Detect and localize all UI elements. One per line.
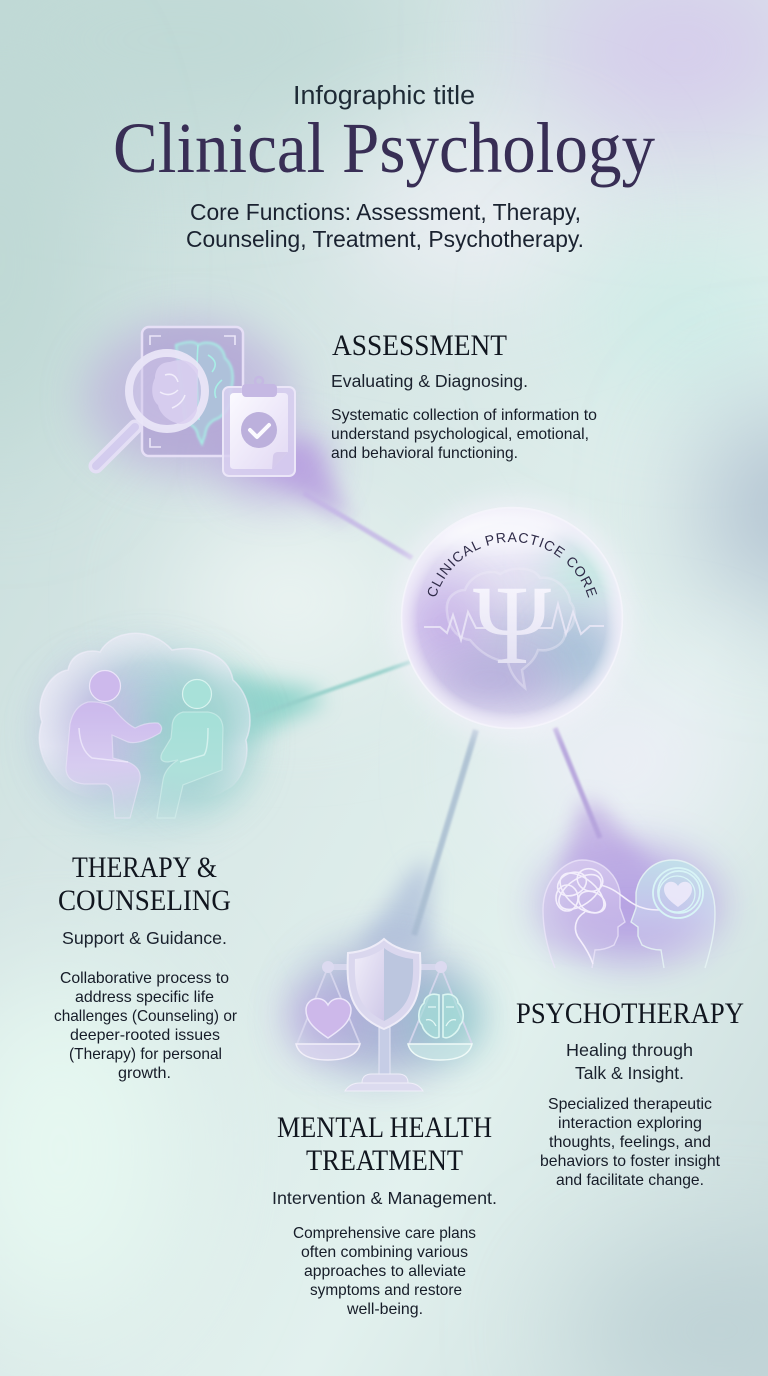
icon: therapy and counseling: [39, 633, 250, 830]
text: mental health treatment: Intervention & Management.: [272, 1188, 497, 1208]
magnifier lens: [129, 353, 205, 429]
text: assessment: ASSESSMENT: [332, 329, 507, 362]
text: therapy and counseling: challenges (Counseling) or: [54, 1008, 237, 1025]
connector: assessment beam: [235, 440, 412, 558]
text: therapy and counseling: [54, 851, 237, 1082]
text: psychotherapy: Healing through: [566, 1040, 693, 1060]
connector: psychotherapy beam: [555, 728, 655, 875]
text: psychotherapy: behaviors to foster insight: [540, 1153, 721, 1170]
text: assessment: Systematic collection of information to: [331, 407, 597, 424]
psi symbol: Ψ: [473, 563, 552, 688]
text: psychotherapy: and facilitate change.: [556, 1172, 704, 1189]
text: assessment: understand psychological, emotional,: [331, 426, 589, 443]
central core: [391, 497, 630, 742]
cloud: [39, 633, 250, 804]
connector: therapy beam: [222, 662, 410, 748]
subtitle: Core Functions: Assessment, Therapy,: [190, 199, 581, 225]
text: mental health treatment: MENTAL HEALTH: [277, 1111, 492, 1144]
text: therapy and counseling: Collaborative process to: [60, 970, 229, 987]
text: psychotherapy: PSYCHOTHERAPY: [516, 997, 744, 1030]
subtitle: [186, 199, 584, 252]
clipboard: [223, 387, 295, 476]
faint brain: [447, 569, 575, 688]
scan frame: [142, 327, 243, 456]
text: assessment: and behavioral functioning.: [331, 445, 518, 462]
text: mental health treatment: Comprehensive care plans: [293, 1225, 476, 1242]
eyebrow: Infographic title: [293, 82, 475, 110]
text: mental health treatment: symptoms and restore: [310, 1282, 462, 1299]
text: psychotherapy: interaction exploring: [558, 1115, 702, 1132]
text: mental health treatment: TREATMENT: [306, 1144, 463, 1177]
text: mental health treatment: often combining various: [301, 1244, 468, 1261]
text: psychotherapy: [516, 997, 744, 1189]
check mark: [241, 412, 277, 448]
beam and strings: [297, 967, 472, 1044]
text: mental health treatment: [272, 1111, 497, 1318]
shield: [348, 939, 420, 1029]
connector: treatment beam: [355, 730, 476, 950]
text: psychotherapy: Talk & Insight.: [575, 1063, 684, 1083]
text: therapy and counseling: COUNSELING: [58, 884, 231, 917]
person: right: [157, 680, 223, 818]
heartbeat line: [424, 604, 604, 640]
tangle: [553, 865, 660, 964]
spiral and heart: [653, 868, 703, 918]
subtitle: Counseling, Treatment, Psychotherapy.: [186, 226, 584, 252]
rim line: [402, 508, 622, 728]
head: right: [631, 860, 715, 968]
text: psychotherapy: thoughts, feelings, and: [549, 1134, 711, 1151]
icon: scales and shield: [292, 939, 478, 1091]
brain scan: [176, 342, 233, 444]
curved label: CLINICAL PRACTICE CORE: [428, 532, 598, 598]
text: psychotherapy: Specialized therapeutic: [548, 1096, 712, 1113]
main title: Clinical Psychology: [113, 108, 655, 188]
text: mental health treatment: well-being.: [346, 1301, 423, 1318]
pans: [296, 1044, 360, 1060]
text: assessment: Evaluating & Diagnosing.: [331, 371, 528, 391]
text: therapy and counseling: deeper-rooted issues: [70, 1027, 220, 1044]
text: therapy and counseling: Support & Guidance.: [62, 928, 227, 948]
text: therapy and counseling: (Therapy) for personal: [69, 1046, 222, 1063]
text: therapy and counseling: growth.: [118, 1065, 171, 1082]
balance brain: [419, 994, 463, 1038]
text: therapy and counseling: address specific life: [75, 989, 214, 1006]
orb: [400, 506, 624, 730]
head: left: [543, 860, 625, 968]
icon: assessment: [85, 320, 330, 500]
text: therapy and counseling: THERAPY &: [72, 851, 217, 884]
text: mental health treatment: approaches to alleviate: [304, 1263, 466, 1280]
icon: psychotherapy heads: [542, 850, 718, 968]
heart: [306, 999, 351, 1038]
person: left: [66, 670, 162, 818]
magnifier handle: [96, 427, 135, 466]
title block: [113, 82, 655, 252]
pole and base: [379, 1020, 390, 1076]
text: assessment: [331, 329, 597, 462]
